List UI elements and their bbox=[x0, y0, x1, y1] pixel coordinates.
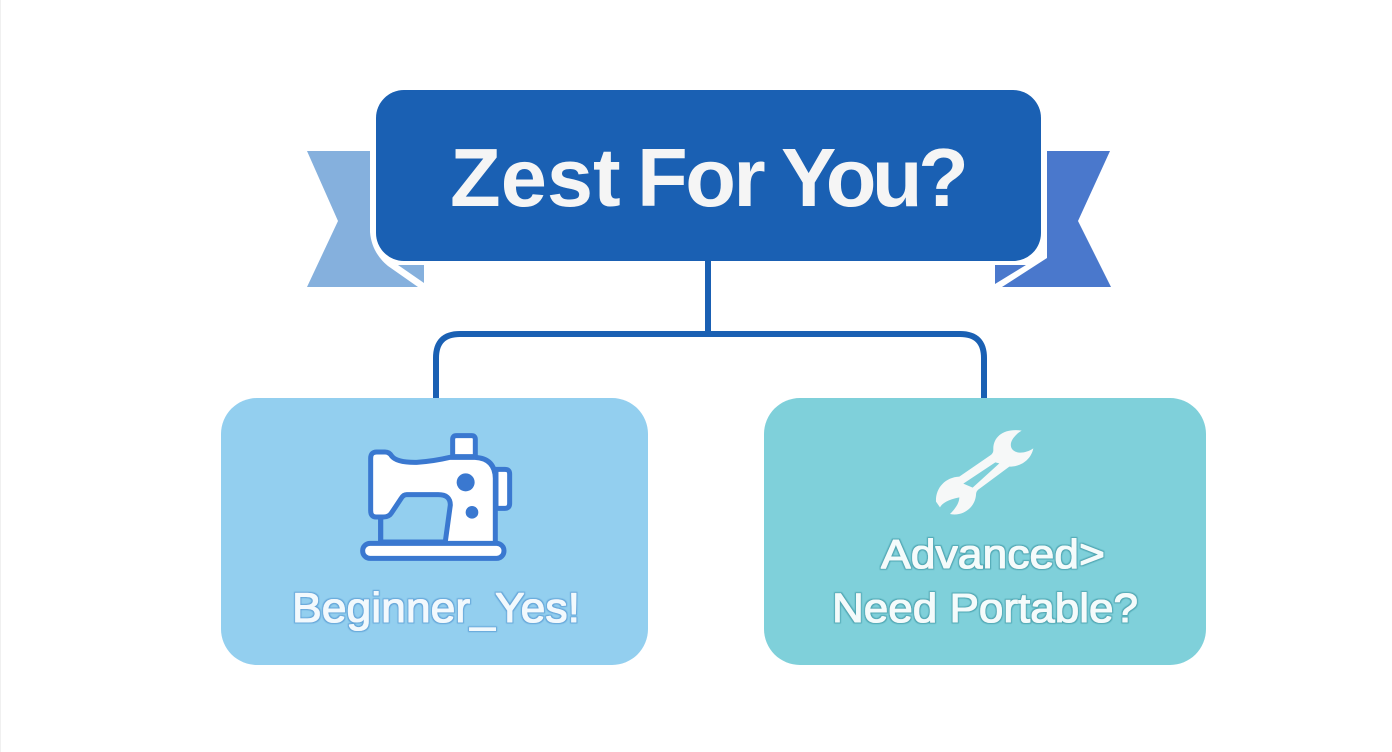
label: advanced: Need Portable? bbox=[832, 585, 1138, 631]
title text: For bbox=[637, 131, 765, 224]
panel: advanced bbox=[764, 398, 1206, 665]
panel: beginner bbox=[221, 398, 648, 665]
icon: sewing machine bbox=[363, 436, 510, 558]
ribbon: right tail bbox=[995, 151, 1111, 287]
label: advanced bbox=[832, 531, 1138, 631]
ribbon: left tail bbox=[307, 151, 424, 287]
title text: Zest bbox=[450, 131, 621, 224]
label: beginner: Beginner_Yes! bbox=[292, 584, 580, 631]
label: advanced: Advanced> bbox=[881, 531, 1105, 577]
icon: wrench bbox=[936, 430, 1033, 514]
title text: You? bbox=[781, 131, 964, 224]
title banner bbox=[376, 90, 1041, 261]
connector lines bbox=[436, 260, 984, 399]
